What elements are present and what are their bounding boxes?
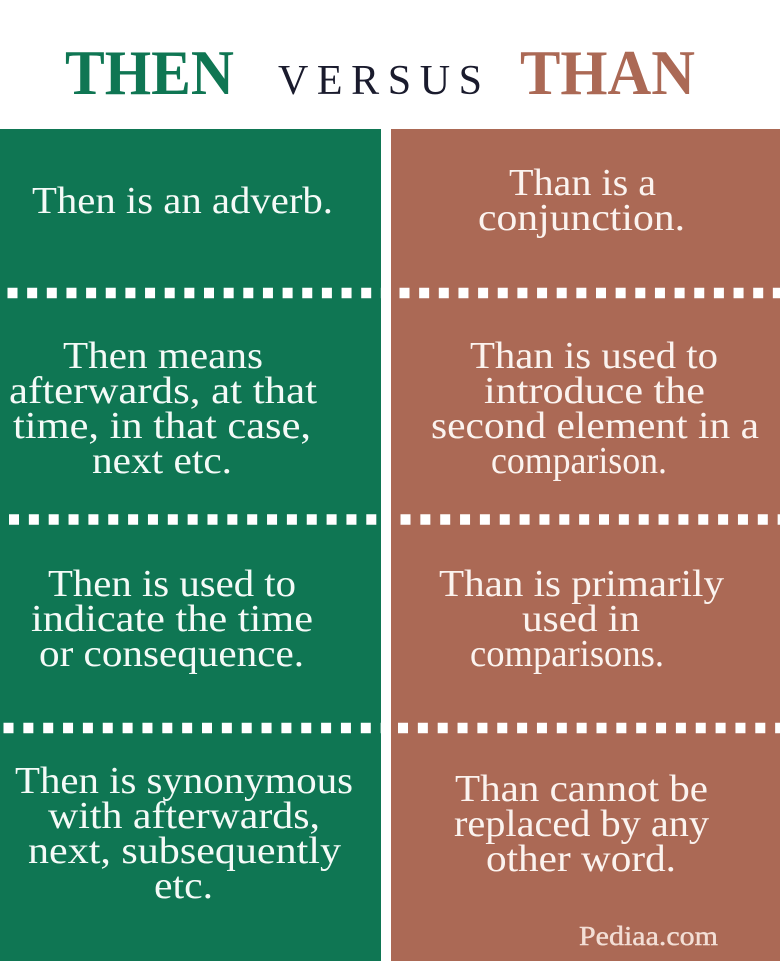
divider: then row 3 [4, 723, 381, 733]
text: then row 4: next, subsequently [28, 830, 341, 872]
panel: than column [391, 129, 780, 961]
text: than row 2 [431, 335, 759, 482]
heading: THEN: THEN [65, 37, 234, 108]
text: then row 2: next etc. [92, 440, 232, 482]
heading: VERSUS: VERSUS [278, 58, 482, 104]
text: then row 4: Then is synonymous [15, 760, 353, 802]
divider: than row 3 [398, 723, 780, 733]
text: then row 4: etc. [154, 865, 213, 907]
text: then row 3 [31, 563, 313, 675]
text: than row 2: Than is used to [470, 335, 718, 377]
text: then row 2: afterwards, at that [9, 370, 317, 412]
text: than row 3 [439, 563, 724, 675]
text: than row 4: replaced by any [454, 803, 709, 845]
text: then row 4 [15, 760, 353, 907]
divider: than row 1 [400, 288, 780, 298]
text: than row 1 [478, 162, 685, 239]
text: than row 1: Than is a [509, 162, 656, 204]
text: than row 3: Than is primarily [439, 563, 724, 605]
text: than row 4: other word. [486, 838, 676, 880]
text: then row 2: Then means [63, 335, 263, 377]
text: than row 4: Than cannot be [455, 768, 708, 810]
text: then row 3: Then is used to [48, 563, 296, 605]
divider: than row 2 [400, 514, 780, 525]
heading: THAN: THAN [520, 37, 695, 108]
text: then row 2 [9, 335, 317, 482]
text: then row 3: or consequence. [39, 633, 304, 675]
text: than row 2: introduce the [484, 370, 705, 412]
text: than row 2: comparison. [491, 440, 667, 482]
panel: then column [0, 129, 381, 961]
brand: Pediaa.com: Pediaa.com [579, 921, 718, 951]
text: than row 4 [454, 768, 709, 880]
text: then row 2: time, in that case, [13, 405, 311, 447]
text: than row 3: comparisons. [470, 633, 664, 675]
text: then row 3: indicate the time [31, 598, 313, 640]
title [65, 37, 695, 108]
text: than row 3: used in [522, 598, 640, 640]
divider: then row 2 [9, 514, 378, 525]
divider: then row 1 [8, 288, 381, 298]
text: than row 2: second element in a [431, 405, 759, 447]
text: then row 1: Then is an adverb. [32, 180, 333, 222]
text: then row 4: with afterwards, [48, 795, 320, 837]
text: than row 1: conjunction. [478, 197, 685, 239]
